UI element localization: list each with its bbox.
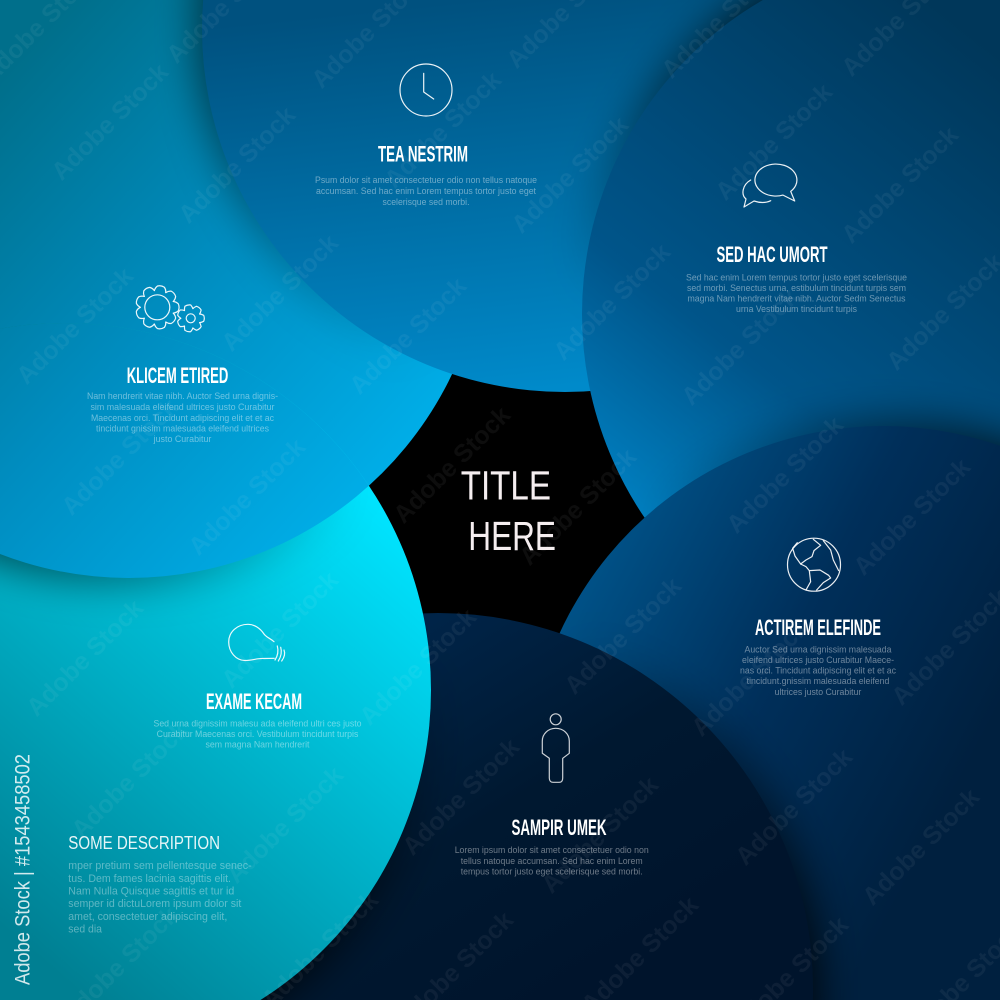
icon: speech bubbles xyxy=(743,164,797,207)
watermarks: Adobe Stock xyxy=(836,121,964,249)
section: tea nestrim xyxy=(315,64,537,207)
text: exame kecam body: sem magna Nam hendrerit xyxy=(206,740,310,750)
text: description body: amet, consectetuer adipiscing elit, xyxy=(68,911,227,923)
text: sampir umek body: Lorem ipsum dolor sit amet consectetuer odio non xyxy=(455,845,649,855)
text: klicem etired body: justo Curabitur xyxy=(153,434,211,444)
watermarks: Adobe Stock xyxy=(686,614,814,742)
text: sed hac umort body: sed morbi. Senectus urna, estibulum tincidunt turpis sem xyxy=(687,283,906,293)
watermarks: Adobe Stock xyxy=(344,272,472,400)
text: exame kecam body: Sed urna dignissim malesu ada eleifend ultri ces justo xyxy=(154,718,362,728)
panel: klicem etired circle xyxy=(0,0,487,578)
text: sampir umek body xyxy=(455,845,649,876)
heading: tea nestrim: TEA NESTRIM xyxy=(378,142,468,166)
title: TITLE xyxy=(461,462,551,508)
watermarks: Adobe Stock xyxy=(46,58,174,186)
watermarks: Adobe Stock xyxy=(548,238,676,366)
watermarks: Adobe Stock xyxy=(559,572,687,700)
text: klicem etired body: Nam hendrerit vitae nibh. Auctor Sed urna dignis- xyxy=(87,391,278,401)
icon: light bulb xyxy=(229,624,285,661)
watermarks: Adobe Stock xyxy=(676,283,804,411)
title: HERE xyxy=(468,513,556,559)
text: klicem etired body xyxy=(87,391,278,444)
title xyxy=(461,462,556,559)
panel: klicem etired overlap on exame kecam xyxy=(0,323,369,609)
watermarks: Adobe Stock xyxy=(173,101,301,229)
text: sed hac umort body: magna Nam hendrerit vitae nibh. Auctor Sedm Senectus xyxy=(688,294,906,304)
text: description body: sed dia xyxy=(68,924,102,936)
text: description body: semper id dictuLorem ipsum dolor sit xyxy=(68,898,241,910)
text: description body: mper pretium sem pellentesque senec- xyxy=(68,860,252,872)
heading: sed hac umort: SED HAC UMORT xyxy=(716,242,828,267)
panel: sampir umek circle xyxy=(56,606,820,1000)
text: actirem elefinde body xyxy=(740,644,897,697)
watermarks: Adobe Stock xyxy=(379,66,507,194)
stock id label: Adobe Stock | #1543458502 xyxy=(10,754,34,985)
panel: actirem elefinde circle xyxy=(520,419,1000,1000)
text: klicem etired body: Maecenas orci. Tincidunt adipiscing elit et et ac xyxy=(91,413,275,423)
heading: sampir umek: SAMPIR UMEK xyxy=(512,815,607,840)
text: tea nestrim body: Psum dolor sit amet consectetuer odio non tellus natoque xyxy=(315,175,537,185)
watermarks: Adobe Stock xyxy=(66,716,194,844)
watermarks: Adobe Stock xyxy=(21,594,149,722)
heading: some description: SOME DESCRIPTION xyxy=(68,832,220,853)
panel: tea nestrim circle xyxy=(195,0,935,399)
section: klicem etired xyxy=(87,285,278,444)
watermarks: Adobe Stock xyxy=(730,743,858,871)
watermarks: Adobe Stock xyxy=(354,603,482,731)
watermarks: Adobe Stock xyxy=(56,393,184,521)
heading: actirem elefinde: ACTIREM ELEFINDE xyxy=(755,615,881,640)
icon: globe xyxy=(788,538,840,591)
watermarks: Adobe Stock xyxy=(183,433,311,561)
panel: sed hac umort circle xyxy=(575,0,1000,684)
watermarks: Adobe Stock xyxy=(721,411,849,539)
icon: person xyxy=(542,714,569,782)
text: exame kecam body: Curabitur Maecenas orci. Vestibulum tincidunt turpis xyxy=(157,729,359,739)
section: some description xyxy=(68,832,252,936)
text: actirem elefinde body: ultrices justo Curabitur xyxy=(775,687,861,697)
watermarks: Adobe Stock xyxy=(514,443,642,571)
text: exame kecam body xyxy=(154,718,362,750)
text: actirem elefinde body: Auctor Sed urna dignissim malesuada xyxy=(744,644,892,654)
text: tea nestrim body xyxy=(315,175,537,207)
text: tea nestrim body: accumsan. Sed hac enim Lorem tempus tortor justo eget xyxy=(316,186,537,196)
watermarks: Adobe Stock xyxy=(216,566,344,694)
section: sampir umek xyxy=(455,714,649,876)
text: description body: tus. Dem fames lacinia sagittis elit. xyxy=(68,873,231,885)
section: sed hac umort xyxy=(686,164,907,314)
watermarks: Adobe Stock xyxy=(536,771,664,899)
text: actirem elefinde body: nas orci. Tincidunt adipiscing elit et et ac xyxy=(740,666,897,676)
icon: gears xyxy=(135,285,204,333)
text: klicem etired body: sim malesuada eleifend ultrices justo Curabitur xyxy=(90,402,275,412)
heading: exame kecam: EXAME KECAM xyxy=(206,689,302,714)
section: exame kecam xyxy=(154,624,362,750)
watermarks: Adobe Stock xyxy=(710,78,838,206)
panel: exame kecam circle xyxy=(0,316,438,1000)
section: actirem elefinde xyxy=(740,538,897,697)
text: actirem elefinde body: eleifend ultrices justo Curabitur Maece- xyxy=(742,655,894,665)
text: tea nestrim body: scelerisque sed morbi. xyxy=(382,197,470,207)
heading: klicem etired: KLICEM ETIRED xyxy=(127,363,228,388)
text: sampir umek body: tellus natoque accumsan. Sed hac enim Lorem xyxy=(461,856,643,866)
watermarks: Adobe Stock xyxy=(848,453,976,581)
text: sed hac umort body: urna Vestibulum tincidunt turpis xyxy=(736,304,858,314)
watermarks: Adobe Stock xyxy=(388,401,516,529)
watermarks: Adobe Stock xyxy=(397,733,525,861)
watermarks: Adobe Stock xyxy=(216,229,344,357)
text: description body: Nam Nulla Quisque sagittis et tur id xyxy=(68,886,234,898)
text: sed hac umort body xyxy=(686,272,907,314)
text: sampir umek body: tempus tortor justo eget scelerisque sed morbi. xyxy=(461,866,643,876)
watermarks: Adobe Stock xyxy=(11,262,139,390)
text: actirem elefinde body: tincidunt.gnissim malesuada eleifend xyxy=(747,676,889,686)
text: sed hac umort body: Sed hac enim Lorem tempus tortor justo eget scelerisque xyxy=(686,272,907,282)
watermarks: Adobe Stock xyxy=(506,111,634,239)
text: description body xyxy=(68,860,252,936)
watermarks: Adobe Stock xyxy=(221,761,349,889)
text: klicem etired body: tincidunt gnissim malesuada eleifend ultrices xyxy=(96,424,270,434)
watermarks: Adobe Stock xyxy=(857,783,985,911)
icon: clock xyxy=(400,64,452,116)
